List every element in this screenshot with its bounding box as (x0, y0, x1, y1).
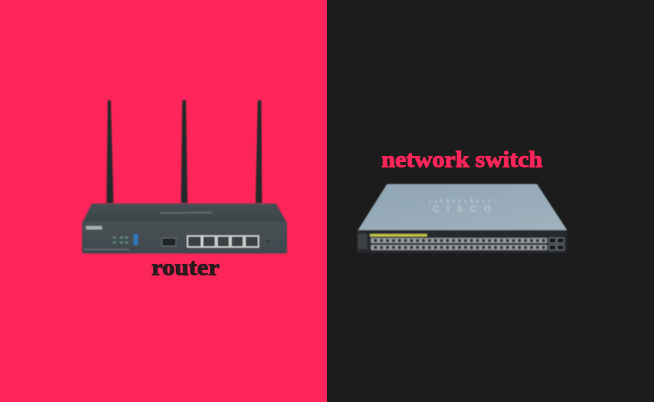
label: network switch: network switch (382, 147, 543, 172)
router reset button (267, 240, 270, 243)
icon: network switch device (357, 184, 567, 253)
switch status panel (358, 234, 367, 249)
router top face (82, 204, 287, 223)
router front face (82, 222, 287, 254)
router antennas (106, 100, 262, 203)
router usb port (134, 234, 138, 245)
cisco logo bars (429, 198, 496, 203)
panel: router background (0, 0, 327, 402)
router logo (86, 226, 102, 230)
switch top face (358, 184, 567, 230)
switch uplink ports (549, 238, 564, 250)
router ethernet ports (188, 236, 258, 247)
router sfp port (162, 238, 176, 246)
panel: network switch background (327, 0, 654, 402)
cisco logo text: CISCO (433, 204, 491, 214)
icon: router device (82, 100, 287, 254)
switch poe strip (370, 234, 427, 236)
switch front face (357, 230, 567, 253)
router status lights (113, 236, 128, 244)
label: router: router (152, 255, 220, 280)
switch ports (371, 238, 547, 250)
